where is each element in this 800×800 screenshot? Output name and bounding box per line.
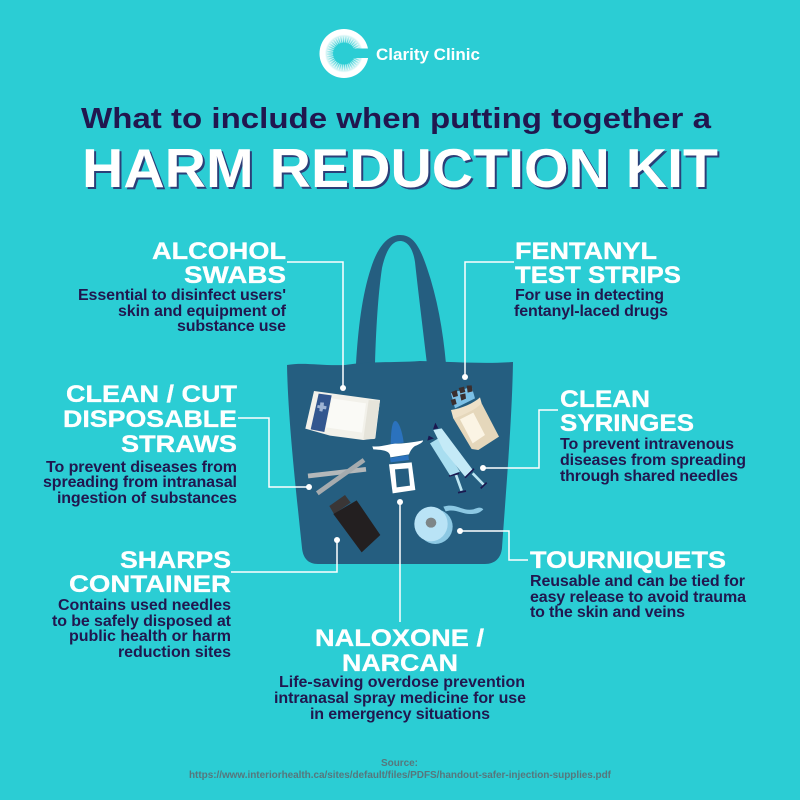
connector: fentanyl strips xyxy=(462,262,514,380)
connector: syringes xyxy=(480,410,558,471)
callout: sharps container: to be safely disposed at xyxy=(52,613,232,630)
callout: sharps container: SHARPS xyxy=(120,547,231,574)
main title: HARM REDUCTION KIT xyxy=(82,138,718,199)
connector: naloxone xyxy=(397,499,403,622)
callout: naloxone: NARCAN xyxy=(342,650,458,677)
item: tourniquet roll xyxy=(414,506,483,544)
callout: fentanyl test strips: fentanyl-laced drugs xyxy=(514,303,668,320)
callout: tourniquets: TOURNIQUETS xyxy=(530,547,726,574)
callout: straws: DISPOSABLE xyxy=(63,406,237,433)
item: naloxone nasal spray xyxy=(372,421,423,493)
item: disposable straws xyxy=(308,460,366,493)
callout: clean syringes xyxy=(560,386,746,485)
source citation: Source: xyxy=(381,758,418,769)
callout: sharps container: CONTAINER xyxy=(69,571,231,598)
callout: straws: spreading from intranasal xyxy=(43,474,237,491)
callout: clean syringes: SYRINGES xyxy=(560,410,694,437)
bag body xyxy=(287,361,513,564)
callout: alcohol swabs: SWABS xyxy=(184,262,286,289)
callout: tourniquets: to the skin and veins xyxy=(530,604,685,621)
callout: straws: STRAWS xyxy=(121,431,237,458)
callout: fentanyl test strips xyxy=(514,238,681,320)
connector: sharps xyxy=(231,537,340,572)
bag handle xyxy=(356,235,446,364)
icon: burst C xyxy=(320,29,371,78)
callout: clean syringes: through shared needles xyxy=(560,468,738,485)
callout: fentanyl test strips: TEST STRIPS xyxy=(515,262,681,289)
callout: straws: To prevent diseases from xyxy=(46,459,237,476)
callout: alcohol swabs xyxy=(78,238,287,335)
subtitle heading: What to include when putting together a xyxy=(81,103,712,135)
illustration: tote bag xyxy=(287,235,513,564)
callout: naloxone: intranasal spray medicine for use xyxy=(274,690,526,707)
callout: clean syringes: To prevent intravenous xyxy=(560,436,734,453)
callout: naloxone: Life-saving overdose prevention xyxy=(279,674,525,691)
callout: straws: CLEAN / CUT xyxy=(66,381,237,408)
callout: alcohol swabs: ALCOHOL xyxy=(152,238,286,265)
callout: sharps container: public health or harm xyxy=(69,628,231,645)
item: fentanyl test strip bottle xyxy=(451,385,499,450)
callout: sharps container xyxy=(52,547,232,661)
callout: naloxone: NALOXONE / xyxy=(315,625,484,652)
item: clean syringes xyxy=(427,423,487,493)
callout: clean syringes: diseases from spreading xyxy=(560,452,746,469)
callout: fentanyl test strips: For use in detecting xyxy=(515,287,664,304)
callout: tourniquets: easy release to avoid trauma xyxy=(530,589,746,606)
connector: straws xyxy=(238,418,312,490)
callout: tourniquets xyxy=(530,547,746,621)
logo: Clarity Clinic xyxy=(320,29,480,78)
callout: tourniquets: Reusable and can be tied for xyxy=(530,573,745,590)
item: black sharps container xyxy=(329,495,380,552)
connector: tourniquets xyxy=(457,528,528,560)
callout: sharps container: Contains used needles xyxy=(58,597,231,614)
source citation: https://www.interiorhealth.ca/sites/default/files/PDFS/handout-safer-injection-supplies.pdf xyxy=(189,770,612,781)
callout: naloxone: in emergency situations xyxy=(310,706,490,723)
connector: alcohol swabs xyxy=(287,262,346,391)
callout: straws xyxy=(43,381,237,507)
callout: straws: ingestion of substances xyxy=(57,490,237,507)
callout: alcohol swabs: substance use xyxy=(177,318,286,335)
callout: sharps container: reduction sites xyxy=(118,644,231,661)
logo wordmark: Clarity Clinic xyxy=(376,45,480,64)
callout: clean syringes: CLEAN xyxy=(560,386,650,413)
callout: fentanyl test strips: FENTANYL xyxy=(515,238,657,265)
item: alcohol swab xyxy=(305,391,380,440)
callout: naloxone xyxy=(274,625,526,723)
source citation xyxy=(189,758,612,781)
callout: alcohol swabs: skin and equipment of xyxy=(118,303,287,320)
callout: alcohol swabs: Essential to disinfect users' xyxy=(78,287,286,304)
